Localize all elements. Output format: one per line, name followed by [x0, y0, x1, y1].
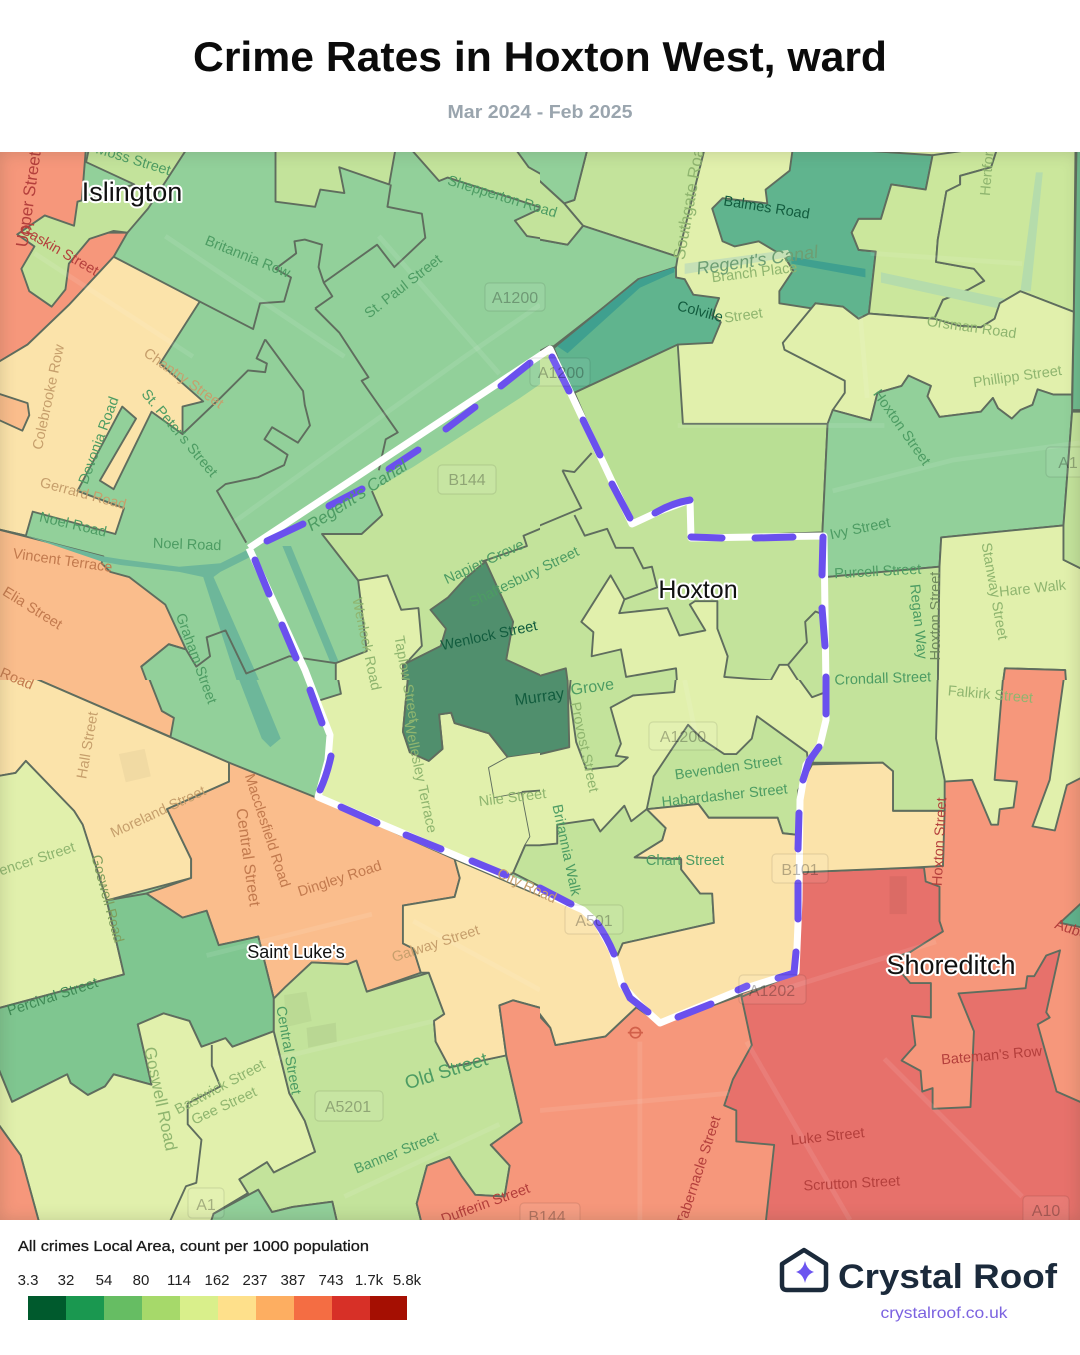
street labels on pale areas: Hertford [978, 143, 998, 196]
street labels on green areas: Banner Street [352, 1129, 441, 1177]
street labels on green areas: Britannia Row [203, 233, 293, 282]
street labels on green areas: Grove [570, 676, 615, 699]
legend: scale values: 32 [58, 1272, 74, 1289]
street labels on pale areas: Branch Place [711, 260, 798, 286]
map regions: north-east quadrant [540, 152, 1080, 680]
icon: house with star [782, 1250, 826, 1290]
street labels on green areas: Graham Street [172, 611, 220, 706]
website link: crystalroof.co.uk [880, 1305, 1009, 1322]
street labels on pale areas: Nile Street [478, 786, 547, 810]
street labels on pale areas: Regent's Canal [695, 241, 820, 278]
street labels on green areas: Devonia Road [76, 395, 122, 487]
street labels on green areas: Ivy Street [829, 515, 892, 543]
street labels on pale areas: Goswell Road [140, 1045, 181, 1153]
street labels on green areas: Percival Street [5, 975, 100, 1019]
street labels on green areas: Chart Street [646, 853, 724, 869]
street labels on cream and orange areas: Elia Street [0, 584, 65, 633]
street labels on pale areas: Provost Street [567, 701, 601, 794]
place label: Islington: Islington [82, 177, 182, 207]
street labels on pale areas: Orsman Road [926, 314, 1017, 342]
legend: scale values: 114 [167, 1272, 191, 1289]
legend: scale values: 387 [280, 1272, 306, 1289]
street labels on green areas [5, 141, 933, 1177]
street labels on red areas: Hoxton Street [928, 572, 944, 660]
street labels on red areas [12, 150, 1080, 1228]
street labels on green areas: Regent's Canal [303, 455, 412, 535]
street labels on pale areas: Southgate Road [670, 137, 710, 261]
ward boundary: Hoxton West [249, 349, 826, 1023]
street labels on pale areas: Stanway Street [978, 541, 1010, 641]
street labels on green areas: Hoxton Street [869, 387, 933, 469]
legend: scale values: 162 [204, 1272, 230, 1289]
street labels on green areas: St. Peter's Street [138, 386, 220, 480]
legend: scale values: 54 [96, 1272, 112, 1289]
title: Crime Rates in Hoxton West, ward [193, 33, 887, 80]
subtitle: date range: Mar 2024 - Feb 2025 [448, 102, 632, 122]
legend: title: All crimes Local Area, count per 1000 population [18, 1238, 369, 1255]
road number shields: B101 [781, 862, 819, 879]
street labels on green areas: Shaftesbury Street [467, 544, 582, 611]
legend: colour swatches [28, 1296, 407, 1320]
street labels on red areas: Scrutton Street [803, 1173, 901, 1195]
legend: scale values: 237 [242, 1272, 268, 1289]
road number shields: A1200 [660, 729, 706, 746]
street labels on cream and orange areas: Dingley Road [296, 858, 384, 900]
place label: Shoreditch: Shoreditch [886, 950, 1016, 980]
road number shields: A1202 [749, 983, 795, 1000]
street labels on green areas: Regan Way [906, 583, 930, 661]
street labels on green areas: Moss Street [94, 141, 172, 179]
street labels on dark teal areas [440, 193, 811, 709]
street labels on green areas: Bevenden Street [674, 753, 783, 783]
legend: scale values: 743 [318, 1272, 344, 1289]
street labels on red areas: Tabernacle Street [674, 1114, 724, 1227]
map edge vignette [0, 152, 1080, 1220]
road number shields: A1 [1058, 455, 1078, 472]
street labels on green areas: Noel Road [153, 536, 222, 554]
street labels on cream and orange areas: Chantry Street [140, 345, 226, 412]
road number shields: A10 [1032, 1203, 1060, 1220]
street labels on cream and orange areas: Gerrard Road [38, 475, 128, 513]
map regions: north-west quadrant [0, 152, 540, 680]
map regions: south-east quadrant [540, 680, 1080, 1220]
street labels on dark teal areas: Murray [514, 686, 565, 709]
street labels on green areas: Shepperton Road [445, 173, 559, 221]
street labels on cream and orange areas: Hall Street [74, 711, 102, 780]
street labels on green areas: Noel Road [38, 510, 108, 541]
street labels on green areas: St. Paul Street [362, 252, 445, 322]
street labels on cream and orange areas [0, 343, 559, 966]
street labels on green areas: Purcell Street [834, 562, 922, 582]
legend: scale values: 3.3 [18, 1272, 38, 1289]
logo: Crystal Roof [782, 1250, 1058, 1296]
street labels on green areas: Britannia Walk [548, 803, 584, 898]
street labels on green areas: Central Street [272, 1005, 304, 1096]
street labels on green areas: Habardasher Street [661, 781, 788, 811]
street labels on cream and orange areas: Goswell Road [87, 853, 126, 945]
street labels on red areas: Luke Street [790, 1125, 865, 1149]
street labels on cream and orange areas: Galway Street [390, 923, 482, 966]
street labels on pale areas [0, 137, 1068, 1153]
street labels on cream and orange areas: Central Street [232, 807, 263, 908]
street labels on red areas: Dufferin Street [439, 1181, 532, 1228]
street labels on dark teal areas: Colville [675, 298, 725, 326]
legend: scale values [18, 1272, 422, 1289]
street labels on cream and orange areas: Moreland Street [108, 783, 208, 841]
street labels on pale areas: Phillipp Street [972, 363, 1063, 391]
street labels on pale areas: Hare Walk [998, 577, 1068, 600]
road number shields: A1200 [492, 290, 538, 307]
ward boundary dashes [255, 357, 826, 1017]
street labels on red areas: Upper Street [12, 150, 45, 248]
street labels on green areas: Crondall Street [834, 669, 931, 689]
legend: scale values: 80 [133, 1272, 149, 1289]
place label: Saint Luke's: Saint Luke's [247, 942, 345, 962]
street labels on green areas: Old Street [402, 1049, 491, 1094]
street labels on red areas: Gaskin Street [17, 222, 101, 279]
street labels on pale areas: Wenlock Road [348, 597, 384, 692]
road number shields: A1 [196, 1197, 216, 1214]
street labels on green areas: Napier Grove [442, 537, 527, 588]
road number shields: B144 [528, 1209, 566, 1226]
road number shields: A5201 [325, 1099, 371, 1116]
street labels on cream and orange areas: Macclesfield Road [241, 772, 293, 890]
road number shields: A1200 [538, 365, 584, 382]
tube station symbol [628, 1027, 643, 1038]
street labels on pale areas: Street [723, 305, 764, 327]
road number shields: B144 [448, 472, 486, 489]
street labels on cream and orange areas: City Road [494, 866, 559, 907]
road number shields: A501 [575, 913, 613, 930]
place label: Hoxton: Hoxton [658, 576, 738, 604]
street labels on pale areas: Bastwick Street [172, 1057, 268, 1118]
street labels on red areas: Bateman's Row [941, 1044, 1043, 1068]
street labels on cream and orange areas: Colebrooke Row [30, 343, 68, 451]
street labels on dark teal areas: Balmes Road [722, 193, 811, 223]
legend: scale values: 5.8k [393, 1272, 422, 1289]
logo wordmark: Crystal Roof [838, 1258, 1058, 1296]
street labels on dark teal areas: Wenlock Street [440, 618, 539, 654]
map regions: south-west quadrant [0, 680, 540, 1220]
street labels on pale areas: Falkirk Street [947, 683, 1034, 707]
road number shields [188, 283, 1080, 1233]
street labels on red areas: Hoxton Street [930, 797, 950, 886]
street labels on pale areas: Taplow Street [390, 635, 421, 724]
street labels on cream and orange areas: Vincent Terrace [12, 546, 113, 576]
legend: scale values: 1.7k [355, 1272, 384, 1289]
street labels on pale areas: Wellesley Terrace [400, 720, 440, 835]
street labels on pale areas: Gee Street [189, 1084, 259, 1128]
